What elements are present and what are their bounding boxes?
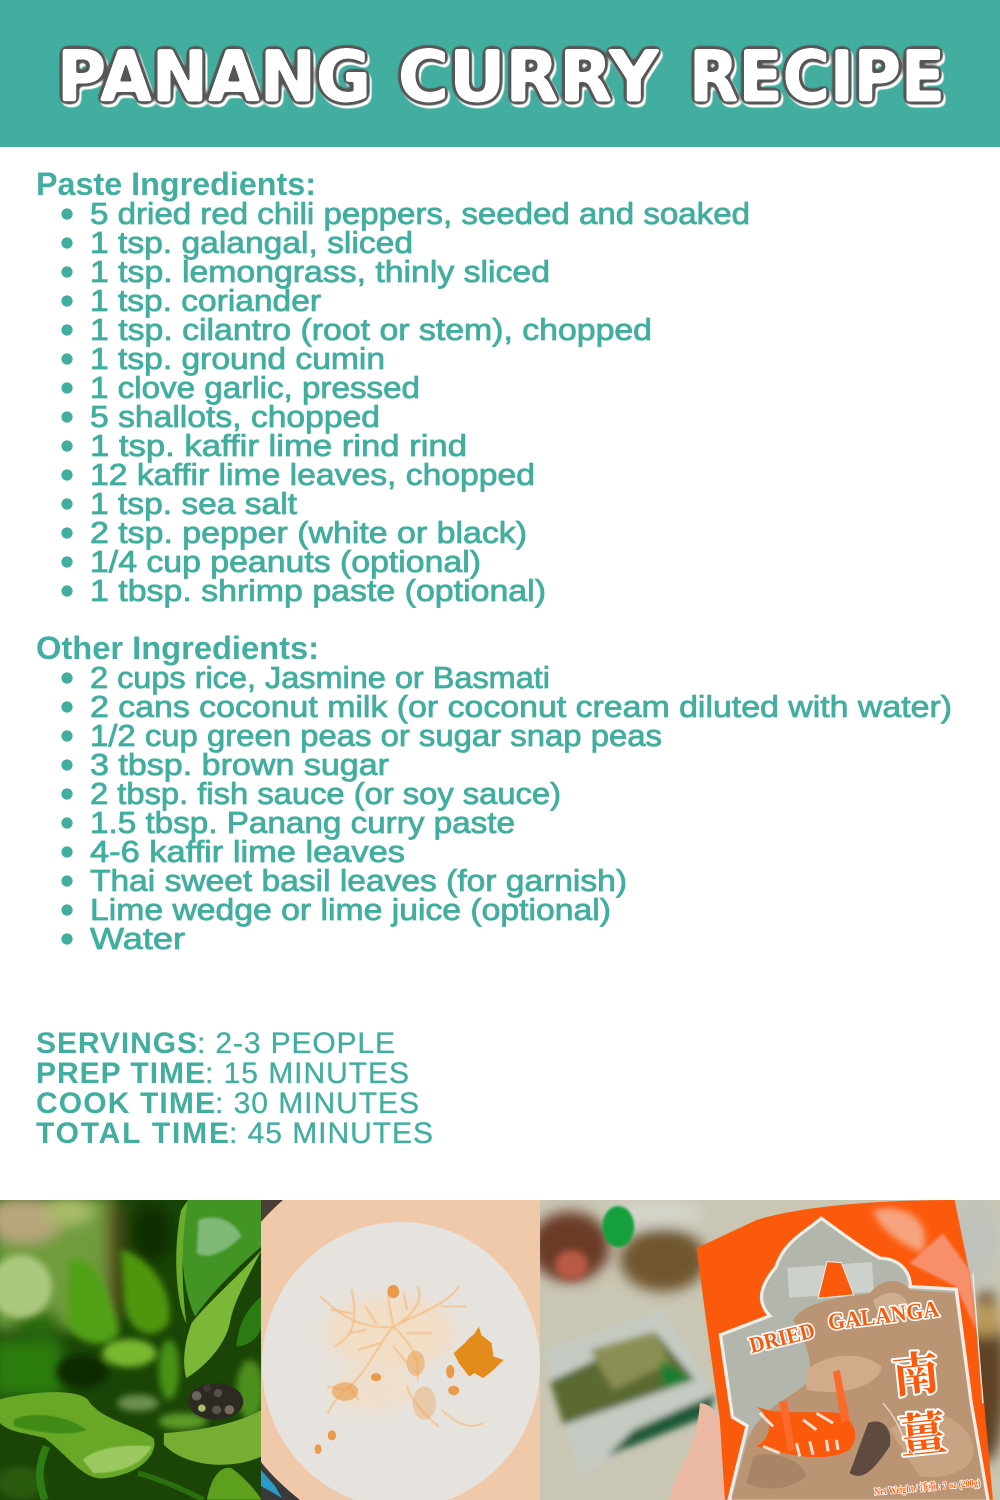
title (57, 36, 945, 118)
list: paste ingredients: 1 tsp. ground cumin (90, 341, 385, 376)
list: paste ingredients: 1 tsp. coriander (90, 283, 321, 318)
recipe timing info: SERVINGS (36, 1027, 197, 1060)
paste blob (454, 1327, 504, 1378)
list: paste ingredients: 12 kaffir lime leaves, chopped (90, 457, 535, 492)
list: paste ingredients: 1 clove garlic, pressed (90, 370, 420, 405)
package labels: 薑 (897, 1407, 949, 1464)
list: other ingredients: 2 cups rice, Jasmine or Basmati (90, 660, 550, 695)
list: other ingredients: Thai sweet basil leaves (for garnish) (90, 863, 627, 898)
package window (720, 1218, 988, 1500)
list: paste ingredients: 2 tsp. pepper (white or black) (90, 515, 527, 550)
recipe timing info: PREP TIME (36, 1057, 205, 1090)
top right leaf (182, 1200, 262, 1317)
list: paste ingredients: 5 dried red chili peppers, seeded and soaked (90, 196, 750, 231)
list: paste ingredients: 1 tsp. lemongrass, thinly sliced (90, 254, 550, 289)
package labels (747, 1296, 981, 1498)
list: paste ingredients: 5 shallots, chopped (90, 399, 380, 434)
package labels: GALANGA (827, 1296, 941, 1336)
blurred green packet (543, 1310, 716, 1476)
list: other ingredients: 1/2 cup green peas or sugar snap peas (90, 718, 662, 753)
hand (670, 1403, 725, 1500)
recipe timing info: COOK TIME (36, 1087, 215, 1120)
list: paste ingredients: 1 tsp. sea salt (90, 486, 297, 521)
list: paste ingredients: 1 tbsp. shrimp paste (optional) (90, 573, 546, 608)
recipe timing info: : 2-3 PEOPLE (197, 1027, 395, 1060)
bottom right leaf (164, 1410, 262, 1465)
package labels: DRIED (747, 1318, 817, 1358)
recipe timing info: : 15 MINUTES (205, 1057, 409, 1090)
list: other ingredients: 2 tbsp. fish sauce (or soy sauce) (90, 776, 561, 811)
photo: coconut milk in pot (261, 1200, 540, 1500)
list: other ingredients: 2 cans coconut milk (or coconut cream diluted with water) (90, 689, 952, 724)
galangal slices (731, 1281, 986, 1500)
bottom left leaf (0, 1392, 154, 1478)
photo: dried galangal package (530, 1197, 1000, 1500)
orange logo (818, 1262, 854, 1298)
list: other ingredients: 4-6 kaffir lime leaves (90, 834, 405, 869)
package labels: 南 (890, 1347, 942, 1404)
seed cluster (188, 1383, 243, 1420)
photo: basil leaves (0, 1195, 264, 1500)
recipe timing info: : 30 MINUTES (215, 1087, 419, 1120)
title: CURRY (398, 36, 660, 118)
wrapper pieces (756, 1406, 855, 1457)
title: RECIPE (689, 36, 945, 118)
header banner (0, 0, 1000, 147)
list: other ingredients: 3 tbsp. brown sugar (90, 747, 389, 782)
recipe timing info: : 45 MINUTES (229, 1117, 433, 1150)
list: paste ingredients: 1 tsp. galangal, sliced (90, 225, 413, 260)
title: PANANG (57, 36, 371, 118)
list: paste ingredients: 1 tsp. kaffir lime rind rind (90, 428, 467, 463)
heading: paste ingredients: Paste Ingredients: (36, 166, 316, 202)
heading: other ingredients: Other Ingredients: (36, 630, 319, 666)
bottom leaf (207, 1468, 262, 1500)
list: paste ingredients (61, 196, 750, 608)
recipe timing info (36, 1027, 433, 1150)
recipe timing info: TOTAL TIME (36, 1117, 229, 1150)
list: paste ingredients: 1/4 cup peanuts (optional) (90, 544, 481, 579)
list: other ingredients: Lime wedge or lime juice (optional) (90, 892, 611, 927)
list: other ingredients (61, 660, 952, 956)
orange bag (697, 1200, 993, 1500)
list: paste ingredients: 1 tsp. cilantro (root or stem), chopped (90, 312, 652, 347)
list: other ingredients: Water (90, 921, 185, 956)
list: other ingredients: 1.5 tbsp. Panang curry paste (90, 805, 515, 840)
